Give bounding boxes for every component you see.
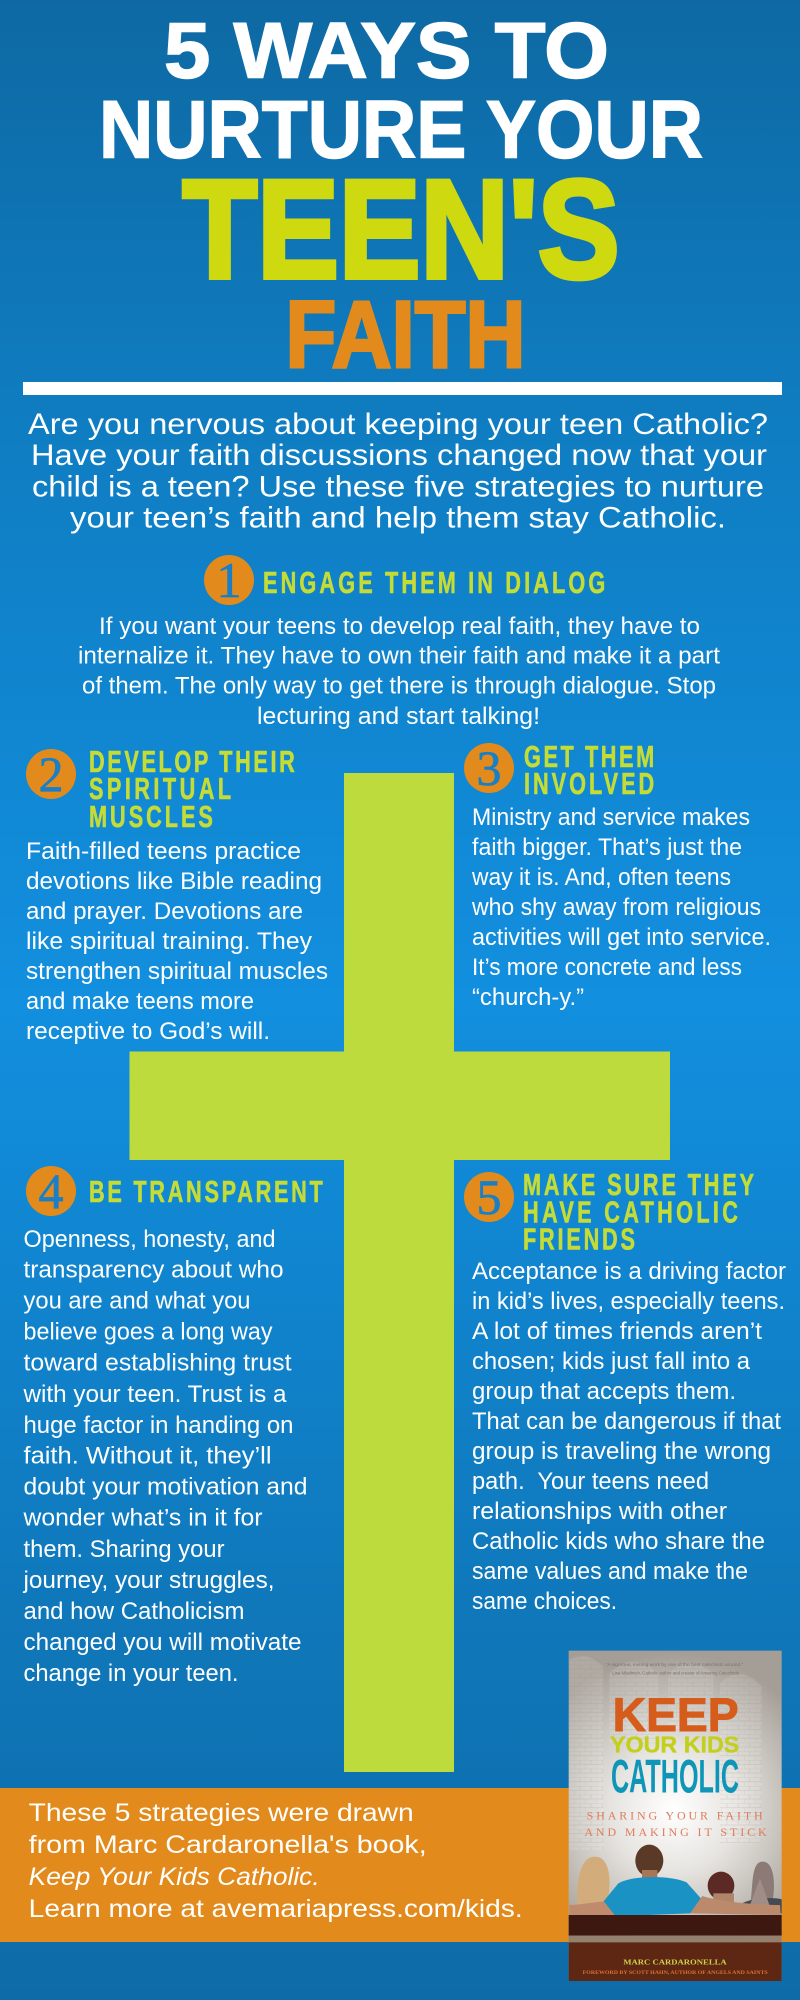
heading: get them involved: INVOLVED [524,766,654,801]
body text [78,613,720,730]
footer text: from Marc Cardaronella's book, [29,1831,427,1859]
panel: strategy 4 [22,1163,323,1687]
heading: get them involved [524,739,654,801]
cover author [583,1957,768,1976]
intro text: your teen’s faith and help them stay Catholic. [70,502,726,534]
body text: and prayer. Devotions are [26,898,303,925]
divider bar [23,382,782,395]
intro text: Are you nervous about keeping your teen Catholic? [28,408,768,441]
title: TEEN'S [182,150,620,308]
body text: in kid’s lives, especially teens. [472,1288,785,1315]
heading: develop their spiritual muscles: SPIRITUAL [89,771,231,806]
body text: path. Your teens need [472,1468,709,1495]
heading: develop their spiritual muscles: MUSCLES [89,799,213,834]
title: FAITH [286,282,526,388]
body text: doubt your motivation and [24,1474,308,1501]
title: NURTURE YOUR [99,84,703,176]
intro text: Have your faith discussions changed now that your [31,439,767,472]
body text: chosen; kids just fall into a [472,1348,751,1375]
body text: who shy away from religious [471,894,761,921]
body text: receptive to God’s will. [26,1018,270,1045]
body text: faith. Without it, they’ll [24,1443,272,1470]
body text: lecturing and start talking! [257,703,540,730]
body text: change in your teen. [24,1660,238,1687]
cover subtitle [584,1808,767,1839]
heading: get them involved: GET THEM [524,739,654,774]
body text: wonder what’s in it for [22,1505,263,1532]
body text: Openness, honesty, and [24,1226,276,1253]
icon: number 4 [26,1163,76,1219]
footer text [29,1799,523,1923]
body text: huge factor in handing on [24,1412,294,1439]
body text: changed you will motivate [24,1629,301,1656]
heading: make sure they have catholic friends [523,1167,754,1257]
heading: make sure they have catholic friends: FRIENDS [523,1222,635,1257]
panel: footer banner [0,1788,800,1942]
body text: like spiritual training. They [26,928,312,955]
body text: group that accepts them. [472,1378,736,1405]
body text: faith bigger. That’s just the [472,834,742,861]
body text [22,1226,307,1687]
icon: number 5 [464,1169,514,1225]
body text [472,1258,786,1615]
cover author: MARC CARDARONELLA [623,1957,727,1966]
stained glass windows [569,1656,762,1850]
body text: Ministry and service makes [472,804,750,831]
panel: strategy 2 [26,744,328,1045]
body text: It’s more concrete and less [472,954,742,981]
body text: believe goes a long way [24,1319,272,1346]
body text: you are and what you [24,1288,250,1315]
intro text: child is a teen? Use these five strategies to nurture [32,470,764,504]
title [99,6,703,388]
body text: them. Sharing your [24,1536,224,1563]
body text: That can be dangerous if that [472,1408,781,1435]
book cover [569,1651,782,1981]
cover quote: Lisa Mladinich, Catholic author and creator of Amazing Catechists [612,1670,739,1675]
pew [569,1915,782,1981]
body text: A lot of times friends aren’t [472,1318,762,1345]
panel: strategy 3 [464,739,771,1011]
body text: and make teens more [26,988,254,1015]
panel: strategy 1 [78,552,720,730]
cover title: KEEP [613,1689,739,1742]
body text: same values and make the [472,1558,748,1585]
heading: make sure they have catholic friends: MAKE SURE THEY [523,1167,754,1202]
body text: activities will get into service. [472,924,771,951]
body text: internalize it. They have to own their faith and make it a part [78,643,720,670]
icon: number 4: 4 [38,1163,64,1219]
cover title: YOUR KIDS [610,1731,739,1757]
icon: number 1: 1 [216,552,242,608]
body text: same choices. [472,1588,617,1615]
body text: Faith-filled teens practice [26,838,301,865]
body text [471,804,771,1011]
cover author: FOREWORD BY SCOTT HAHN, AUTHOR OF ANGELS AND SAINTS [583,1971,768,1976]
body text: group is traveling the wrong [472,1438,771,1465]
footer text: Keep Your Kids Catholic. [29,1863,320,1891]
body text: journey, your struggles, [22,1567,274,1594]
body text: with your teen. Trust is a [22,1381,287,1408]
cover quote [606,1662,744,1675]
family on pew [569,1845,782,1917]
cover quote: "A vigorous, inviting work by one of the best catechists around." [606,1662,744,1667]
body text [26,838,328,1045]
heading: make sure they have catholic friends: HAVE CATHOLIC [523,1195,738,1229]
footer text: These 5 strategies were drawn [29,1799,414,1827]
body text: Acceptance is a driving factor [472,1258,786,1285]
body text: of them. The only way to get there is through dialogue. Stop [82,673,716,700]
cover title [610,1689,739,1803]
body text: transparency about who [24,1256,284,1284]
footer text: Learn more at avemariapress.com/kids. [29,1895,523,1923]
title: 5 WAYS TO [164,6,609,94]
icon: number 3 [464,740,514,796]
icon: number 3: 3 [476,740,502,796]
body text: Catholic kids who share the [472,1528,765,1555]
cover subtitle: AND MAKING IT STICK [584,1825,767,1839]
icon: number 2 [26,746,76,802]
intro text [28,408,768,534]
heading: engage them in dialog: ENGAGE THEM IN DIALOG [263,565,605,600]
body text: If you want your teens to develop real faith, they have to [99,613,700,640]
heading: be transparent: BE TRANSPARENT [89,1174,323,1209]
panel: strategy 5 [464,1167,786,1615]
icon: number 5: 5 [476,1169,502,1225]
heading: develop their spiritual muscles: DEVELOP THEIR [89,744,295,779]
body text: “church-y.” [472,984,584,1011]
body text: and how Catholicism [24,1598,244,1625]
icon: number 1 [204,552,254,608]
body text: relationships with other [472,1498,727,1525]
body text: devotions like Bible reading [26,868,322,895]
body text: way it is. And, often teens [471,864,731,891]
cover subtitle: SHARING YOUR FAITH [587,1808,763,1822]
body text: toward establishing trust [24,1350,292,1377]
cross [130,773,670,1772]
body text: strengthen spiritual muscles [26,958,328,985]
heading: develop their spiritual muscles [89,744,295,834]
icon: number 2: 2 [38,746,64,802]
